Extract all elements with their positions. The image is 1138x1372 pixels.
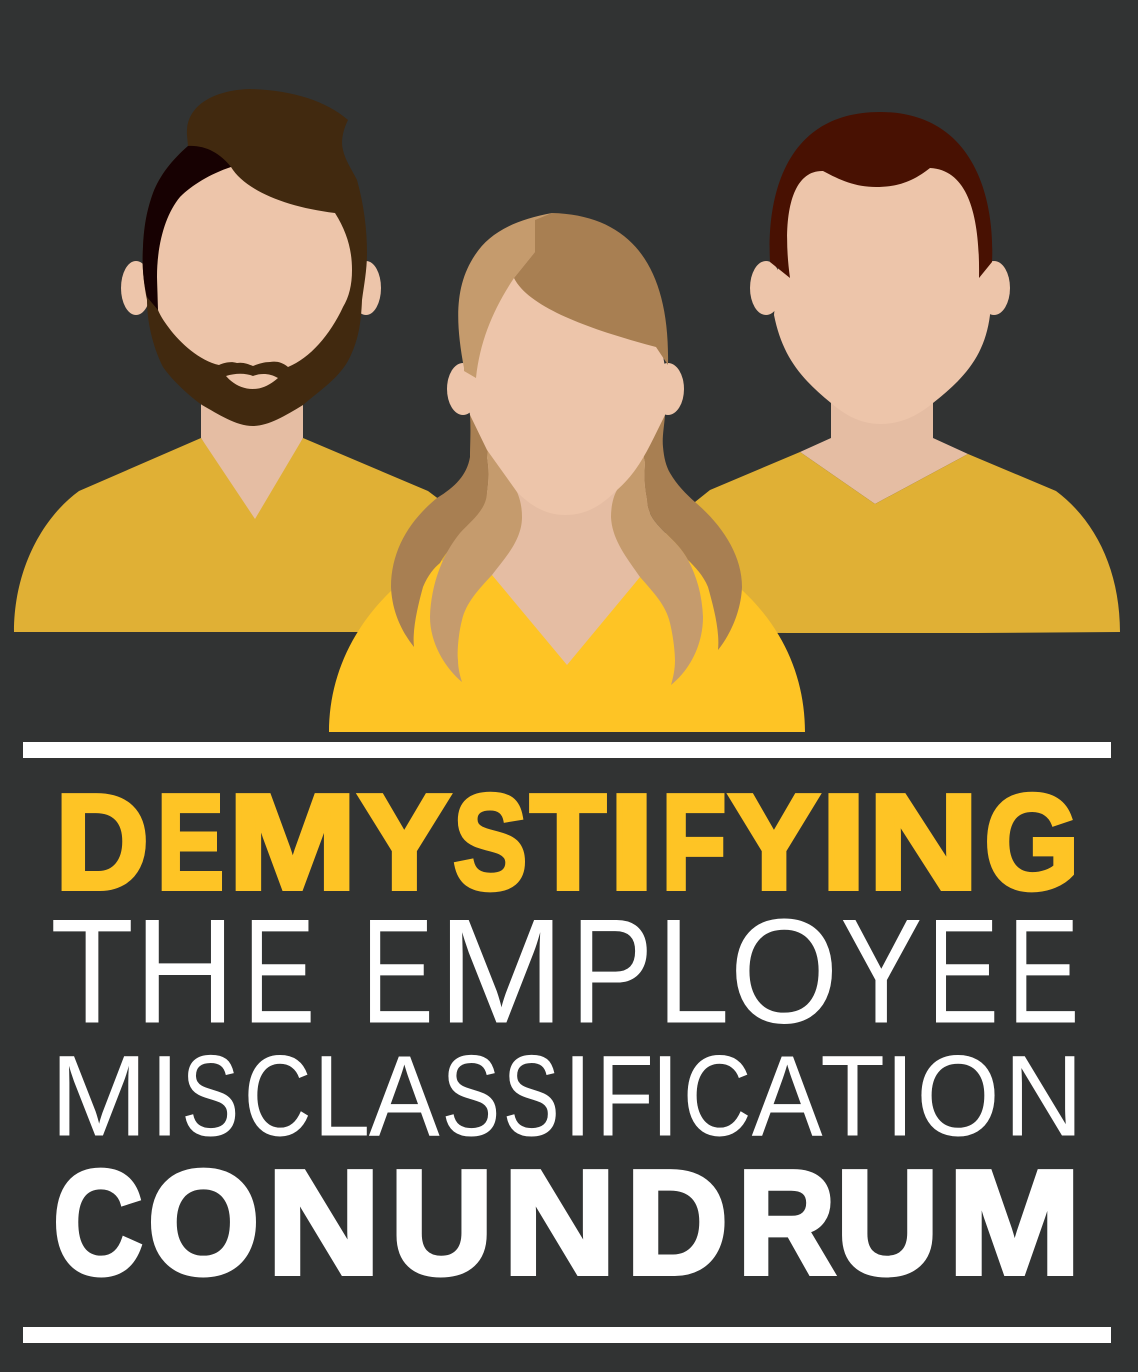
person: man with red hair bbox=[640, 112, 1120, 633]
top divider bbox=[23, 742, 1111, 758]
title line: demystifying: T bbox=[530, 766, 606, 918]
title line: misclassification: S bbox=[503, 1032, 560, 1160]
title line: conundrum: U bbox=[390, 1140, 493, 1306]
title line: demystifying: S bbox=[453, 766, 527, 918]
title line: the employee: E bbox=[1007, 888, 1080, 1054]
title line: misclassification: I bbox=[149, 1032, 180, 1160]
title line: demystifying: I bbox=[820, 766, 867, 918]
title line: misclassification: C bbox=[683, 1032, 752, 1160]
title line: demystifying: Y bbox=[728, 766, 820, 918]
title line: the employee: T bbox=[50, 888, 134, 1054]
title line: conundrum: R bbox=[737, 1140, 836, 1306]
title line: conundrum: M bbox=[948, 1140, 1081, 1306]
title line: misclassification: T bbox=[820, 1032, 885, 1160]
title line: demystifying: G bbox=[984, 766, 1079, 918]
title line: the employee: P bbox=[570, 888, 653, 1054]
title line: demystifying: F bbox=[661, 766, 726, 918]
title line: conundrum: O bbox=[148, 1140, 260, 1306]
title line: the employee: M bbox=[437, 888, 565, 1054]
title line: demystifying: E bbox=[157, 766, 224, 918]
title line: misclassification: A bbox=[369, 1032, 440, 1160]
title line: the employee: O bbox=[730, 888, 839, 1054]
title line: conundrum: C bbox=[53, 1140, 143, 1306]
title line: misclassification: M bbox=[50, 1032, 148, 1160]
title line: demystifying: M bbox=[228, 766, 357, 918]
title line: the employee: L bbox=[657, 888, 730, 1054]
title line: misclassification: I bbox=[562, 1032, 593, 1160]
title line: misclassification: F bbox=[596, 1032, 654, 1160]
title line: misclassification: C bbox=[244, 1032, 312, 1160]
title line: conundrum: N bbox=[267, 1140, 381, 1306]
person: bearded man bbox=[14, 89, 460, 632]
title line: misclassification: I bbox=[884, 1032, 915, 1160]
title line: demystifying: D bbox=[55, 766, 149, 918]
title bbox=[50, 766, 1083, 1306]
title line: the employee: H bbox=[134, 888, 236, 1054]
title line: misclassification: N bbox=[1004, 1032, 1083, 1160]
title line: misclassification: O bbox=[916, 1032, 1000, 1160]
title line: demystifying: N bbox=[868, 766, 979, 918]
title line: demystifying: I bbox=[608, 766, 655, 918]
title line: conundrum: D bbox=[626, 1140, 728, 1306]
title line: misclassification: S bbox=[181, 1032, 239, 1160]
title line: demystifying: Y bbox=[358, 766, 451, 918]
person: blonde woman bbox=[329, 213, 805, 732]
title line: the employee: E bbox=[243, 888, 315, 1054]
title line: misclassification: A bbox=[752, 1032, 823, 1160]
title line: misclassification: L bbox=[313, 1032, 370, 1160]
title line: misclassification: I bbox=[650, 1032, 680, 1160]
title line: the employee: E bbox=[361, 888, 434, 1054]
bottom divider bbox=[23, 1327, 1111, 1343]
title line: the employee: E bbox=[927, 888, 999, 1054]
title line: misclassification: S bbox=[442, 1032, 500, 1160]
title line: the employee: Y bbox=[840, 888, 922, 1054]
title line: conundrum: N bbox=[503, 1140, 616, 1306]
title line: conundrum: U bbox=[836, 1140, 939, 1306]
